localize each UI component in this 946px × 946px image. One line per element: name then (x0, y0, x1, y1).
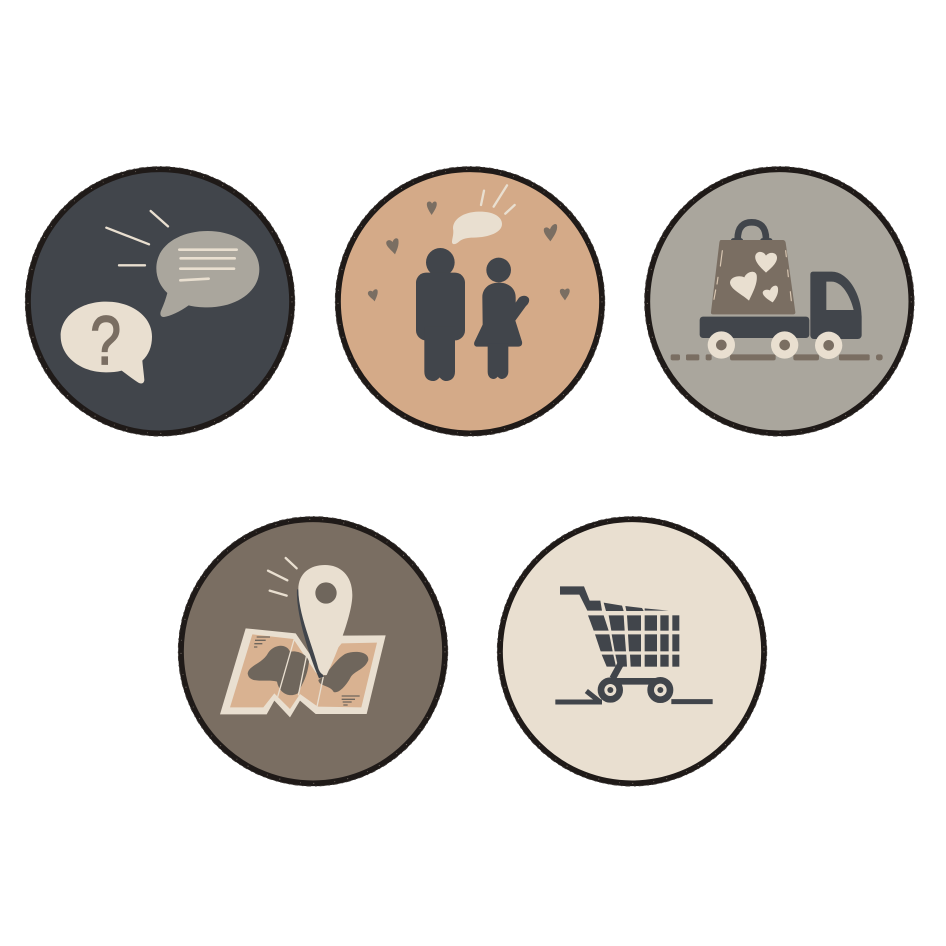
cream speech bubble with question mark (61, 302, 152, 383)
small speech bubble (452, 212, 502, 244)
emphasis lines (268, 558, 297, 596)
map folds (278, 634, 323, 707)
badge: conversation speech bubbles (25, 167, 295, 436)
truck wheels (708, 331, 842, 359)
emphasis lines (481, 185, 515, 214)
bag hearts (730, 252, 778, 302)
badge: shopping cart (497, 517, 767, 786)
hearts (368, 201, 570, 301)
location pin (297, 565, 352, 678)
cart handle (560, 586, 602, 611)
badge: couple talking with hearts (335, 167, 605, 436)
woman silhouette (474, 258, 529, 379)
truck cab (810, 272, 862, 339)
badge: map with location pin (178, 517, 448, 786)
emphasis lines (106, 211, 168, 265)
man silhouette (416, 248, 465, 381)
truck flatbed (700, 317, 809, 338)
cart frame and wheels (601, 658, 670, 700)
bag handle (733, 222, 770, 241)
road dashes (671, 354, 883, 360)
cream speech bubble with question mark: ? (90, 303, 121, 379)
bag stitching (714, 251, 791, 301)
cart basket grid (588, 603, 679, 667)
ground lines (555, 691, 713, 702)
map landmasses (248, 646, 309, 695)
map legend lines (254, 637, 360, 705)
folded map (220, 628, 386, 717)
badge: delivery truck carrying a shopping bag (645, 167, 914, 436)
gray speech bubble with text lines (156, 231, 259, 317)
shopping bag (711, 240, 795, 314)
